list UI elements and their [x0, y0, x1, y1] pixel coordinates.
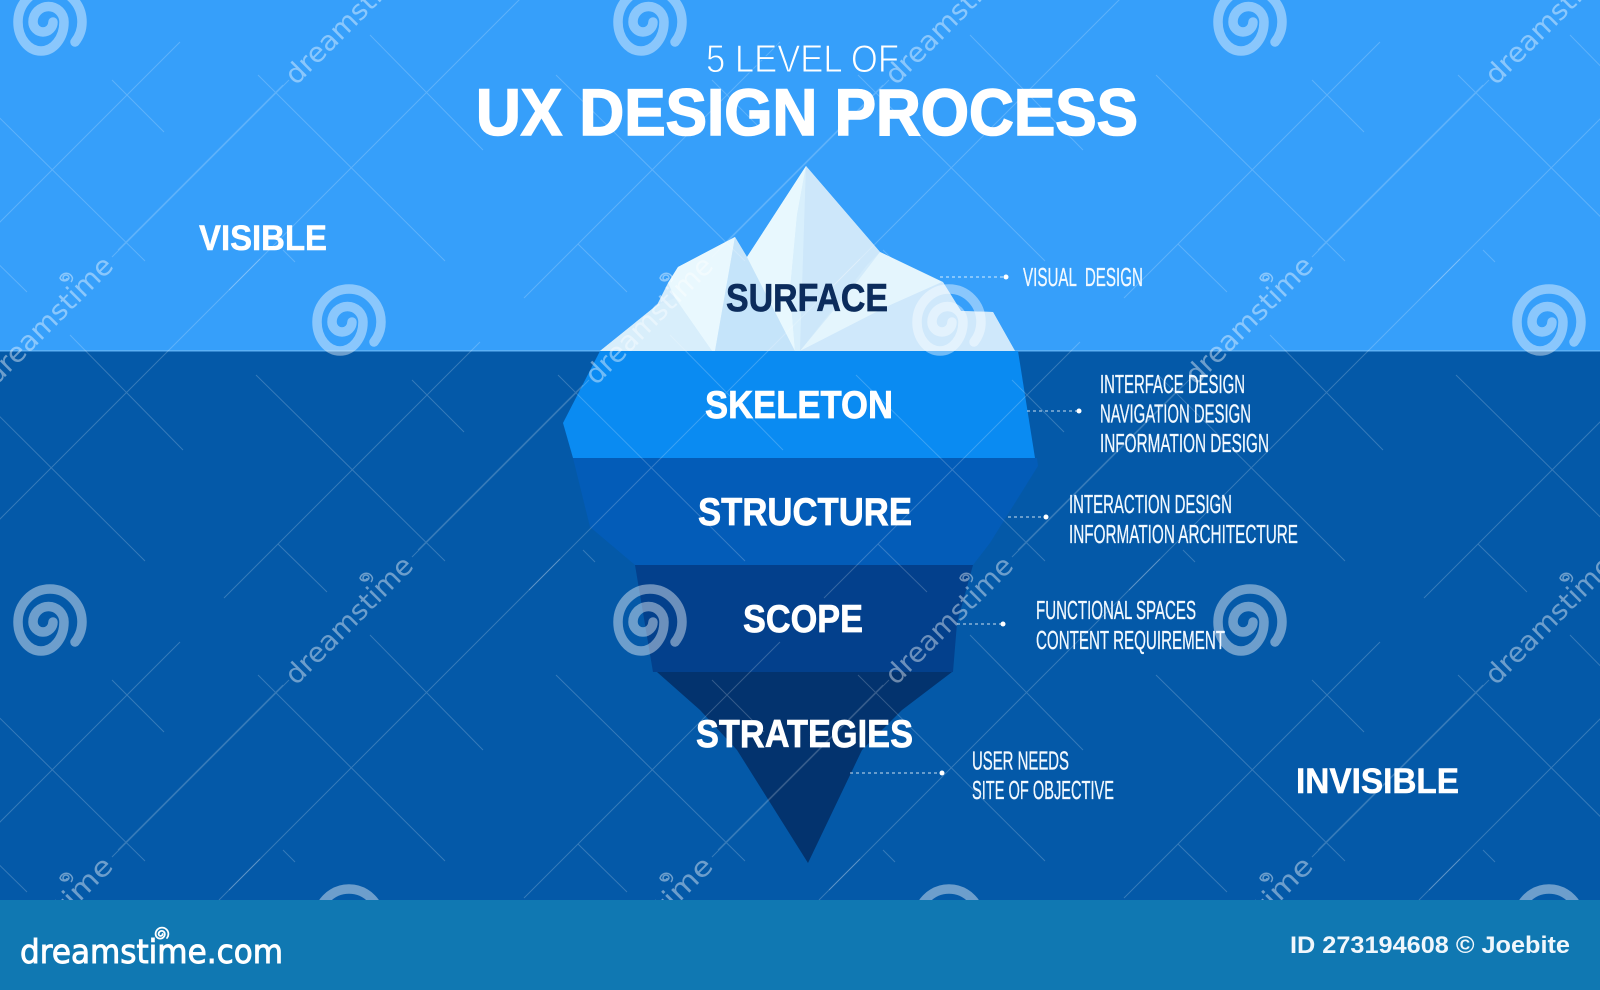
- callout: skeleton items: [1027, 369, 1269, 458]
- callout: strategies items: [850, 746, 1114, 805]
- panel: sky background: [0, 0, 1600, 351]
- iceberg level: strategies tip: [657, 672, 952, 863]
- title: main heading: UX DESIGN PROCESS: [476, 75, 1138, 149]
- icon: footer logo spiral: [156, 928, 168, 939]
- side label: visible: VISIBLE: [199, 219, 327, 258]
- level label: structure: STRUCTURE: [698, 491, 912, 534]
- level label: strategies: STRATEGIES: [696, 713, 913, 756]
- iceberg level: surface tip: [600, 166, 1015, 351]
- water line: [0, 350, 1600, 352]
- callout: structure items: INTERACTION DESIGN: [1069, 489, 1232, 519]
- footer logo text: dreamstime.com: [20, 932, 283, 971]
- callout: skeleton items: INTERFACE DESIGN: [1100, 369, 1245, 399]
- footer band: [0, 900, 1600, 990]
- panel: deep sea background: [0, 351, 1600, 901]
- callout: scope items: [957, 595, 1225, 655]
- title: small line: 5 LEVEL OF: [706, 38, 899, 81]
- watermark: dreamstime words: dreamstime: [579, 250, 720, 391]
- iceberg level: skeleton band: [563, 351, 1035, 458]
- level label: surface: SURFACE: [726, 277, 888, 320]
- iceberg level: structure band: [573, 458, 1038, 565]
- watermark: dreamstime words: time: [648, 851, 719, 922]
- watermark: dreamstime words: time: [1248, 851, 1319, 922]
- callout: skeleton items: NAVIGATION DESIGN: [1100, 398, 1251, 428]
- watermark: dreamstime words: time: [48, 851, 119, 922]
- side label: invisible: INVISIBLE: [1296, 762, 1459, 801]
- iceberg diagram: [563, 166, 1038, 863]
- watermark: small copyright marks: [60, 273, 1572, 882]
- callout: visual design: VISUAL DESIGN: [1023, 262, 1143, 292]
- footer image id: ID 273194608 © Joebite: [1290, 932, 1570, 959]
- callout: structure items: INFORMATION ARCHITECTURE: [1069, 519, 1298, 549]
- callout: strategies items: USER NEEDS: [972, 746, 1069, 776]
- callout: structure items: [1008, 489, 1298, 549]
- callout: scope items: CONTENT REQUIREMENT: [1036, 625, 1225, 655]
- iceberg level: scope band: [635, 565, 973, 672]
- callout: scope items: FUNCTIONAL SPACES: [1036, 595, 1196, 625]
- callout: strategies items: SITE OF OBJECTIVE: [972, 775, 1114, 805]
- watermark: dreamstime words: dreamstime: [879, 550, 1020, 691]
- level label: scope: SCOPE: [743, 598, 863, 641]
- callout: visual design: [940, 262, 1143, 292]
- level label: skeleton: SKELETON: [705, 384, 893, 427]
- callout: skeleton items: INFORMATION DESIGN: [1100, 428, 1269, 458]
- watermark: dreamstime words: dreamstime: [1179, 250, 1320, 391]
- watermark: dreamstime words: dreamstime: [279, 550, 420, 691]
